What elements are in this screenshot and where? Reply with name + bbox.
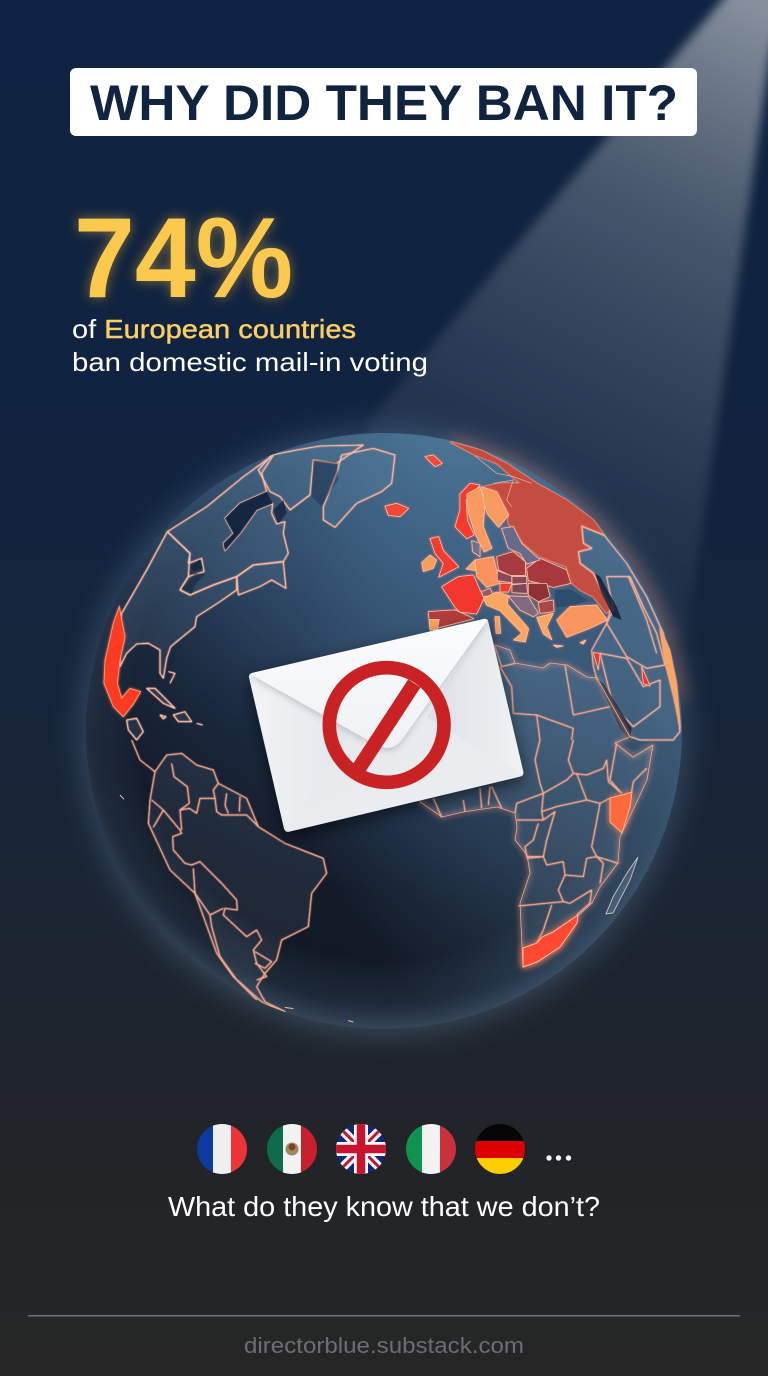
flag: mexico bbox=[267, 1124, 318, 1174]
africa south borders bbox=[433, 740, 647, 943]
south africa bbox=[523, 915, 578, 967]
caspian sea and red sea bbox=[555, 573, 632, 740]
africa north borders bbox=[495, 647, 610, 740]
envelope folds bbox=[249, 619, 523, 832]
globe outer glow bbox=[82, 429, 686, 1033]
europe highlighted countries bbox=[385, 455, 650, 686]
mexico bbox=[104, 607, 141, 717]
flag: italy bbox=[406, 1124, 457, 1174]
title banner: WHY DID THEY BAN IT? bbox=[90, 75, 678, 131]
globe bbox=[82, 429, 686, 1033]
hudson bay and arctic waters bbox=[182, 460, 338, 594]
statistic description bbox=[72, 314, 428, 377]
north america bbox=[119, 445, 395, 740]
envelope with prohibition sign bbox=[249, 619, 523, 832]
ellipsis dots bbox=[546, 1155, 571, 1161]
south america bbox=[132, 740, 327, 1012]
central asia and middle east bbox=[578, 526, 680, 740]
spotlight beam bbox=[366, 0, 768, 640]
russia and northern asia bbox=[450, 442, 611, 613]
map: continents and highlighted countries bbox=[104, 442, 681, 1027]
globe sphere bbox=[86, 433, 682, 1029]
prohibition sign bbox=[329, 668, 444, 782]
closing question: What do they know that we don’t? bbox=[168, 1191, 600, 1222]
reddish rim glow near russia bbox=[450, 442, 680, 700]
kenya bbox=[610, 792, 632, 833]
flag: france bbox=[197, 1124, 248, 1174]
envelope body bbox=[249, 619, 523, 832]
footer divider bbox=[28, 1315, 740, 1316]
arctic coast lines bbox=[475, 456, 532, 507]
africa bbox=[420, 645, 653, 967]
statistic 74%: 74% bbox=[74, 195, 293, 322]
footer source url: directorblue.substack.com bbox=[244, 1333, 524, 1358]
flag row bbox=[197, 1124, 571, 1175]
flag: germany bbox=[475, 1124, 525, 1175]
statistic description: of European countries bbox=[72, 314, 356, 344]
statistic description: ban domestic mail-in voting bbox=[72, 347, 428, 377]
east rim highlight bbox=[659, 627, 681, 732]
flag: united kingdom bbox=[336, 1124, 386, 1174]
madagascar bbox=[606, 857, 638, 914]
southern islands bbox=[120, 795, 353, 1027]
